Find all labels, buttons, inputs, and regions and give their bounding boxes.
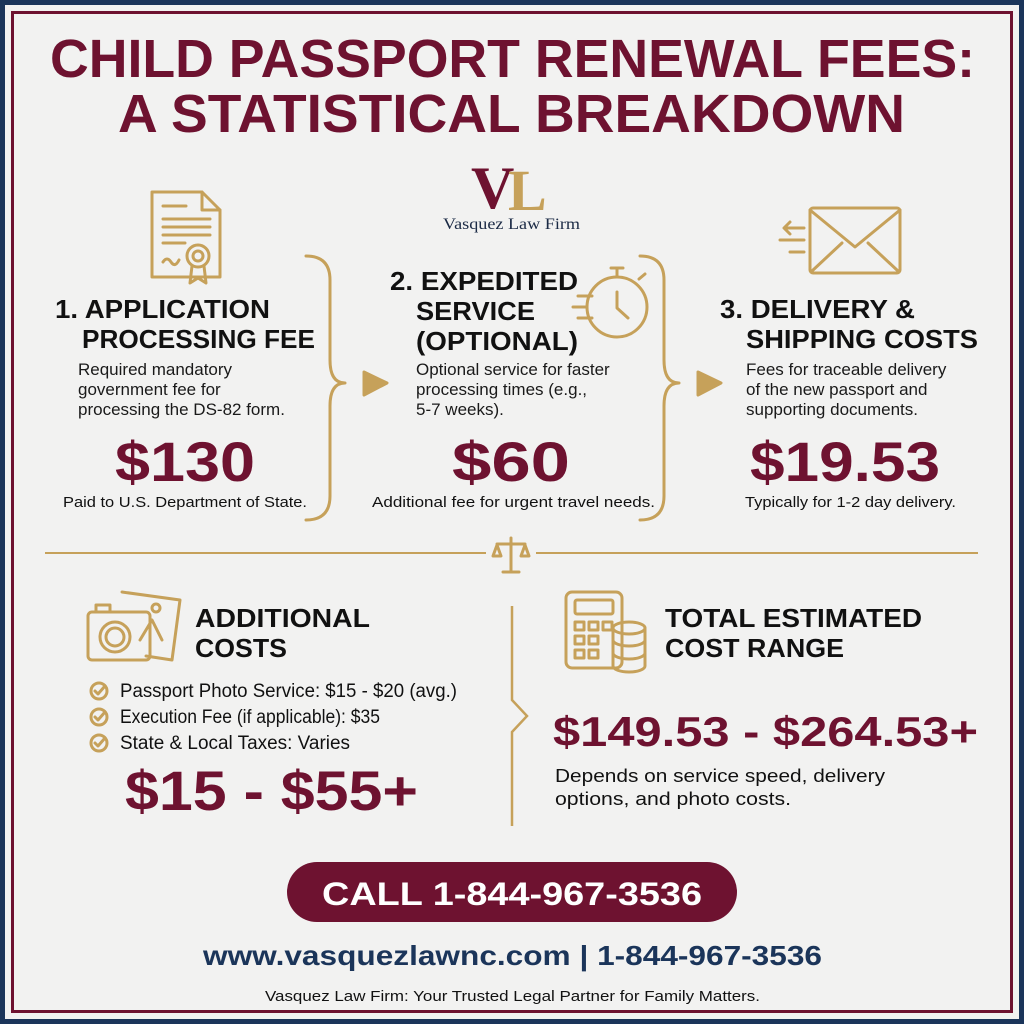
section: total estimated cost range: COST RANGE [665, 633, 844, 663]
section: total estimated cost range: Depends on service speed, delivery [555, 766, 885, 786]
column 3: SHIPPING COSTS [746, 324, 978, 354]
section: additional costs: Passport Photo Service: $15 - $20 (avg.) [120, 681, 457, 702]
footer tagline: Vasquez Law Firm: Your Trusted Legal Partner for Family Matters. [265, 988, 760, 1005]
column 2: 2. EXPEDITED [390, 266, 578, 296]
title: A STATISTICAL BREAKDOWN [118, 84, 905, 144]
section: additional costs: $15 - $55+ [125, 759, 418, 822]
call button [287, 862, 737, 922]
section: additional costs [91, 603, 457, 822]
column 3: 3. DELIVERY & [720, 294, 915, 324]
logo: L [508, 158, 547, 223]
section: total estimated cost range: $149.53 - $264.53+ [553, 708, 978, 755]
icon: stopwatch [573, 268, 647, 337]
column 2: processing times (e.g., [416, 380, 587, 399]
column 1: Paid to U.S. Department of State. [63, 494, 307, 511]
column 1: PROCESSING FEE [82, 324, 315, 354]
column 2: Additional fee for urgent travel needs. [372, 494, 655, 511]
logo [443, 155, 581, 233]
column 2: (OPTIONAL) [416, 326, 578, 356]
logo: V [471, 155, 514, 221]
icon: calculator and coins [566, 592, 645, 672]
section: additional costs: State & Local Taxes: Varies [120, 733, 350, 754]
column 3 [720, 294, 978, 511]
column 1: Required mandatory [78, 360, 233, 379]
column 2: $60 [452, 430, 570, 493]
column 3: Typically for 1-2 day delivery. [745, 494, 956, 511]
section: total estimated cost range [553, 603, 978, 809]
logo: Vasquez Law Firm [443, 216, 581, 233]
icon: camera and photo [88, 592, 180, 660]
vertical divider [512, 606, 527, 826]
column 3: $19.53 [750, 430, 940, 493]
website and phone: www.vasquezlawnc.com | 1-844-967-3536 [202, 940, 822, 971]
column 3: of the new passport and [746, 380, 927, 399]
column 2: Optional service for faster [416, 360, 610, 379]
column 1: 1. APPLICATION [55, 294, 270, 324]
column 3: supporting documents. [746, 400, 918, 419]
arrow: bracket 2 [640, 256, 721, 520]
call button: CALL 1-844-967-3536 [322, 876, 702, 912]
column 3: Fees for traceable delivery [746, 360, 947, 379]
column 1: processing the DS-82 form. [78, 400, 285, 419]
divider with scale icon [45, 538, 978, 572]
section: additional costs: COSTS [195, 633, 287, 663]
column 2: SERVICE [416, 296, 535, 326]
title [50, 29, 975, 144]
column 1: $130 [115, 430, 255, 493]
section: additional costs: Execution Fee (if applicable): $35 [120, 707, 380, 728]
column 1: government fee for [78, 380, 221, 399]
arrow: bracket 1 [306, 256, 387, 520]
icon: document certificate [152, 192, 220, 283]
section: additional costs: ADDITIONAL [195, 603, 370, 633]
icon: envelope [780, 208, 900, 273]
section: total estimated cost range: TOTAL ESTIMATED [665, 603, 922, 633]
column 2 [372, 266, 655, 511]
title: CHILD PASSPORT RENEWAL FEES: [50, 29, 975, 89]
section: total estimated cost range: options, and photo costs. [555, 789, 791, 809]
column 1 [55, 294, 315, 511]
column 2: 5-7 weeks). [416, 400, 504, 419]
